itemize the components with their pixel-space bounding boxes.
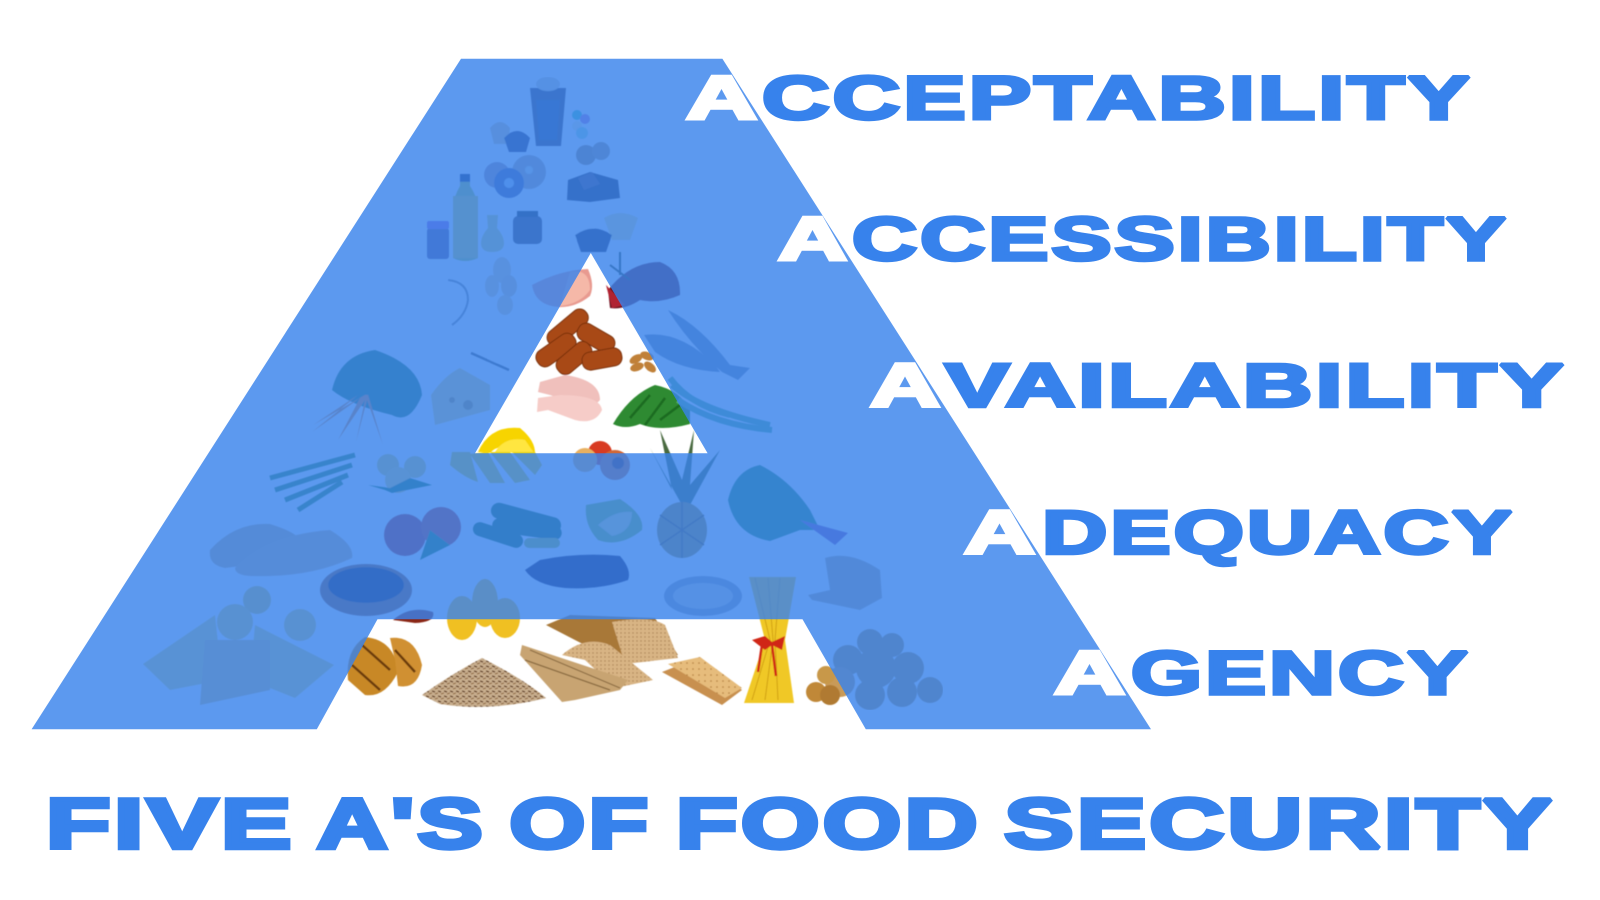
label: adequacy: A (964, 498, 1035, 566)
milk jug (414, 272, 468, 342)
muffins (490, 122, 530, 152)
label: accessibility: A (778, 205, 847, 273)
pears (368, 454, 432, 493)
label: adequacy (964, 498, 1515, 566)
cola glass (530, 77, 566, 146)
fish (644, 310, 750, 380)
title: A'S (317, 784, 486, 863)
sliced bread loaf (546, 615, 678, 664)
avocado (586, 499, 642, 542)
label: accessibility: CCESSIBILITY (852, 205, 1509, 273)
title: FOOD (676, 784, 981, 863)
bean bowl (320, 564, 412, 616)
bananas lower (450, 452, 542, 483)
blue letter A overlay (32, 59, 1151, 729)
honey jar (513, 211, 542, 244)
apple (588, 441, 612, 465)
pineapple (657, 502, 707, 558)
title: SECURITY (1004, 784, 1556, 863)
bread slices blue region (808, 556, 882, 610)
eggs (485, 257, 517, 315)
cucumbers (471, 501, 563, 550)
sausages (533, 306, 623, 378)
eggplant (525, 555, 629, 588)
food pyramid photo layer (143, 77, 943, 710)
potatoes (806, 629, 943, 710)
label: agency (1054, 639, 1471, 707)
small oil jug (481, 215, 504, 252)
bananas upper (478, 428, 535, 453)
yogurt glass and spoon (471, 326, 513, 370)
title: OF (510, 784, 652, 863)
peach (573, 448, 630, 480)
label: availability: A (870, 351, 940, 419)
tagliatelle nests (447, 579, 520, 640)
spaghetti bundle (744, 577, 796, 703)
oats pile (562, 642, 653, 688)
label: availability (870, 351, 1567, 419)
milk glass (388, 283, 414, 345)
arugula greens (613, 385, 690, 428)
seeds pile (664, 576, 742, 616)
label: acceptability (686, 64, 1473, 132)
knot rolls (348, 637, 422, 695)
cheese wedge (431, 368, 490, 425)
lettuce (728, 465, 848, 545)
cream cups (564, 213, 638, 252)
list: five A's (686, 64, 1567, 707)
label: acceptability: CCEPTABILITY (762, 64, 1473, 132)
raw ham (532, 269, 592, 307)
wild rice pile (422, 658, 546, 707)
oil bottle (453, 174, 478, 261)
crackers (662, 657, 742, 705)
asparagus (270, 455, 355, 510)
label: acceptability: A (686, 64, 757, 132)
chocolate (567, 172, 620, 202)
red meat (606, 252, 680, 308)
title: FIVE (46, 784, 295, 863)
purple jar (427, 221, 449, 259)
label: accessibility (778, 205, 1509, 273)
celery (670, 378, 772, 430)
red beans (393, 610, 433, 623)
pasta pile (143, 586, 334, 705)
chicken legs (537, 375, 602, 421)
label: agency: A (1054, 639, 1125, 707)
almonds (628, 350, 658, 375)
wholemeal noodles (520, 645, 628, 702)
label: availability: VAILABILITY (945, 351, 1567, 419)
pineapple crown (650, 430, 720, 505)
tomatoes (384, 507, 461, 560)
carrots with greens (312, 350, 422, 445)
label: agency: GENCY (1131, 639, 1471, 707)
candies (572, 110, 590, 139)
small cookies (576, 142, 610, 165)
donuts (484, 155, 546, 198)
label: adequacy: DEQUACY (1042, 498, 1515, 566)
bread rolls (210, 524, 352, 576)
title (46, 784, 1556, 863)
